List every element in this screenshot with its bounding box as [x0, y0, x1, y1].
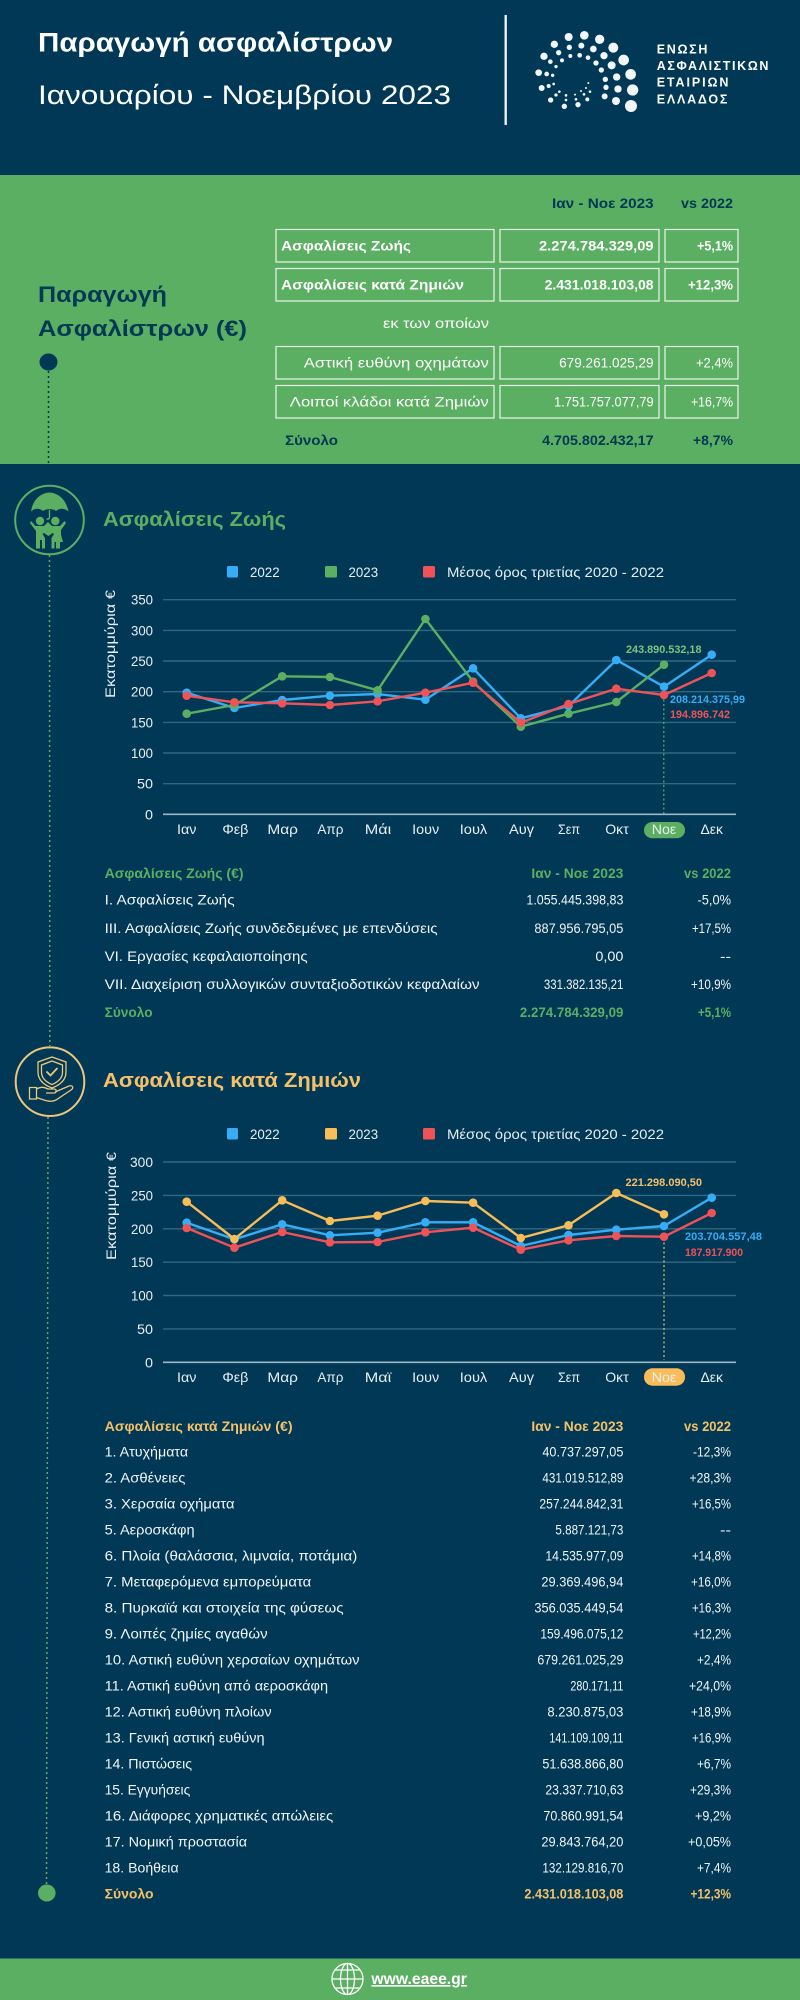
- row: life insurance: Ασφαλίσεις Ζωής: [281, 238, 411, 254]
- y axis title: Εκατομμύρια €: [103, 1152, 119, 1260]
- y axis ticks: 200: [131, 684, 153, 700]
- table: non-life insurance: 1. Ατυχήματα: [105, 1444, 188, 1459]
- month labels: Δεκ: [700, 1369, 724, 1385]
- logo text: ΕΛΛΑΔΟΣ: [657, 92, 728, 106]
- table: non-life insurance: 14.535.977,09: [545, 1548, 623, 1563]
- month labels: Οκτ: [605, 821, 629, 837]
- table: life insurance: VΙ. Εργασίες κεφαλαιοποίησης: [105, 949, 308, 964]
- value callouts: 194.896.742: [670, 709, 730, 721]
- row: total: [285, 432, 734, 448]
- logo: dot arc: [535, 31, 638, 112]
- month labels: Ιαν: [177, 1369, 196, 1385]
- table: non-life insurance: 9. Λοιπές ζημίες αγαθών: [105, 1626, 268, 1641]
- timeline connector: non-life section: [46, 1117, 48, 1885]
- of which label: εκ των οποίων: [383, 315, 489, 331]
- table: non-life insurance: 51.638.866,80: [542, 1756, 623, 1771]
- table total: [105, 1886, 731, 1902]
- table: non-life insurance: 8. Πυρκαϊά και στοιχεία της φύσεως: [105, 1600, 344, 1615]
- table total: 2.274.784.329,09: [520, 1005, 623, 1020]
- table: non-life insurance: +2,4%: [697, 1652, 731, 1667]
- month labels: Σεπ: [558, 1369, 580, 1385]
- table: non-life insurance: 16. Διάφορες χρηματικές απώλειες: [105, 1808, 334, 1823]
- row: total: 4.705.802.432,17: [542, 432, 654, 448]
- table: non-life insurance: 13. Γενική αστική ευθύνη: [105, 1730, 265, 1745]
- y axis ticks: 100: [131, 1288, 153, 1304]
- table total: [105, 1005, 731, 1020]
- table: non-life insurance: 431.019.512,89: [542, 1470, 623, 1485]
- panel heading: [38, 282, 247, 341]
- legend: life chart: [227, 564, 664, 580]
- month labels: Φεβ: [222, 1369, 248, 1385]
- table header: Ασφαλίσεις κατά Ζημιών (€): [105, 1419, 293, 1434]
- y axis title: Εκατομμύρια €: [102, 590, 118, 698]
- table: non-life insurance: 40.737.297,05: [542, 1444, 623, 1459]
- table total: +12,3%: [690, 1886, 731, 1902]
- table: non-life insurance: +28,3%: [690, 1470, 731, 1485]
- month labels: Αυγ: [509, 821, 534, 837]
- table: non-life insurance: 23.337.710,63: [545, 1782, 623, 1797]
- table: non-life insurance: +18,9%: [691, 1704, 731, 1719]
- value callouts: [626, 1177, 762, 1259]
- table: non-life insurance: +14,8%: [692, 1548, 731, 1563]
- table: non-life insurance: 12. Αστική ευθύνη πλοίων: [105, 1704, 272, 1719]
- row: motor liability: 679.261.025,29: [559, 354, 654, 370]
- table: non-life insurance: 7. Μεταφερόμενα εμπορεύματα: [105, 1574, 312, 1589]
- column headers: [552, 195, 733, 211]
- table: non-life insurance: +16,5%: [692, 1496, 731, 1511]
- table: life insurance: --: [720, 949, 731, 964]
- value callouts: 187.917.900: [685, 1247, 743, 1259]
- series: 2022: [187, 1198, 712, 1246]
- row: life insurance: +5,1%: [697, 238, 733, 254]
- icon: globe: [332, 1964, 363, 1994]
- y axis ticks: 150: [131, 1254, 153, 1270]
- month labels: Απρ: [317, 821, 343, 837]
- timeline start dot: [40, 354, 58, 463]
- logo text: ΕΤΑΙΡΙΩΝ: [657, 76, 728, 90]
- table header: Ασφαλίσεις Ζωής (€): [105, 866, 244, 881]
- table: non-life insurance: 18. Βοήθεια: [105, 1860, 179, 1875]
- icon: shield over hand: [16, 1047, 84, 1116]
- timeline connector: life section: [48, 555, 51, 1046]
- table header: vs 2022: [684, 1419, 731, 1434]
- row: motor liability: Αστική ευθύνη οχημάτων: [304, 354, 489, 370]
- month labels: [177, 1369, 724, 1385]
- y axis ticks: [130, 1154, 153, 1370]
- table: non-life insurance: +6,7%: [697, 1756, 731, 1771]
- legend: life chart: 2023: [348, 564, 378, 580]
- table: non-life insurance: [105, 1419, 731, 1902]
- table header: [105, 1419, 731, 1434]
- table: non-life insurance: 15. Εγγυήσεις: [105, 1782, 191, 1797]
- row: other non-life classes: 1.751.757.077,79: [554, 394, 654, 410]
- table: non-life insurance: 159.496.075,12: [540, 1626, 623, 1641]
- series: 2023: [187, 1193, 664, 1239]
- panel heading: Ασφαλίστρων (€): [38, 316, 247, 341]
- row: motor liability: [276, 346, 738, 379]
- table: non-life insurance: 70.860.991,54: [543, 1808, 624, 1823]
- table: non-life insurance: 5. Αεροσκάφη: [105, 1522, 195, 1537]
- table: non-life insurance: +9,2%: [695, 1808, 731, 1823]
- table: non-life insurance: +16,3%: [692, 1600, 731, 1615]
- row: life insurance: 2.274.784.329,09: [539, 238, 654, 254]
- series: three-year average: [187, 1213, 712, 1250]
- row: total: +8,7%: [693, 432, 734, 448]
- table: life insurance: +10,9%: [691, 977, 731, 992]
- month labels: Φεβ: [222, 821, 248, 837]
- table: non-life insurance: 29.369.496,94: [541, 1574, 624, 1589]
- table: life insurance: -5,0%: [698, 893, 731, 908]
- table: non-life insurance: 257.244.842,31: [539, 1496, 623, 1511]
- y axis ticks: 0: [145, 806, 153, 822]
- line chart: non-life insurance monthly premiums: [103, 1152, 762, 1386]
- row: non-life insurance: [276, 268, 738, 301]
- month labels: Μάι: [365, 821, 391, 837]
- legend: non-life chart: [227, 1126, 664, 1142]
- y axis ticks: 50: [137, 776, 153, 792]
- footer bar: [0, 1958, 800, 2000]
- line chart: life insurance monthly premiums: [102, 590, 745, 838]
- table: life insurance: 0,00: [595, 949, 623, 964]
- table: life insurance: 331.382.135,21: [544, 977, 623, 992]
- month labels: Σεπ: [558, 821, 580, 837]
- table: non-life insurance: 14. Πιστώσεις: [105, 1756, 193, 1771]
- row: non-life insurance: +12,3%: [688, 276, 734, 292]
- row: non-life insurance: Ασφαλίσεις κατά Ζημιών: [281, 276, 464, 292]
- month labels: Απρ: [317, 1369, 343, 1385]
- row: other non-life classes: Λοιποί κλάδοι κατά Ζημιών: [290, 394, 489, 410]
- row: other non-life classes: +16,7%: [691, 394, 733, 410]
- table header: Ιαν - Νοε 2023: [531, 866, 624, 881]
- y axis ticks: 200: [131, 1221, 153, 1237]
- table: non-life insurance: 132.129.816,70: [542, 1860, 623, 1875]
- value callouts: 243.890.532,18: [626, 644, 702, 656]
- table total: Σύνολο: [105, 1886, 154, 1902]
- table: non-life insurance: +29,3%: [690, 1782, 731, 1797]
- value callouts: 221.298.090,50: [626, 1177, 702, 1189]
- month labels: Οκτ: [605, 1369, 629, 1385]
- heading: non-life insurance: Ασφαλίσεις κατά Ζημιών: [103, 1070, 361, 1092]
- table: non-life insurance: -12,3%: [693, 1444, 731, 1459]
- y axis ticks: 250: [131, 653, 153, 669]
- series: 2022: [187, 655, 712, 718]
- row: motor liability: +2,4%: [696, 354, 733, 370]
- table header: vs 2022: [684, 866, 731, 881]
- table: non-life insurance: +12,2%: [693, 1626, 731, 1641]
- month labels: Μαϊ: [365, 1369, 392, 1385]
- subtitle: Ιανουαρίου - Νοεμβρίου 2023: [38, 80, 451, 110]
- logo text: ΕΝΩΣΗ: [657, 42, 707, 56]
- table: non-life insurance: +16,0%: [691, 1574, 731, 1589]
- table header: Ιαν - Νοε 2023: [531, 1419, 624, 1434]
- table: non-life insurance: --: [720, 1522, 731, 1537]
- heading: life insurance: Ασφαλίσεις Ζωής: [103, 509, 286, 531]
- November marker: [663, 1238, 665, 1360]
- value callouts: [626, 644, 745, 721]
- table: non-life insurance: 679.261.025,29: [537, 1652, 623, 1667]
- value callouts: 203.704.557,48: [685, 1231, 762, 1243]
- table: non-life insurance: 11. Αστική ευθύνη από αεροσκάφη: [105, 1679, 328, 1694]
- table: non-life insurance: 8.230.875,03: [547, 1704, 623, 1719]
- table: non-life insurance: 2. Ασθένειες: [105, 1470, 186, 1485]
- month labels: Νοε: [652, 821, 676, 837]
- table: life insurance: Ι. Ασφαλίσεις Ζωής: [105, 893, 235, 908]
- y axis ticks: 300: [130, 1154, 153, 1170]
- table: non-life insurance: 17. Νομική προστασία: [105, 1834, 247, 1849]
- title: Παραγωγή ασφαλίστρων: [38, 28, 393, 58]
- legend: non-life chart: Μέσος όρος τριετίας 2020 - 2022: [447, 1126, 664, 1142]
- table: non-life insurance: 280.171,11: [570, 1679, 623, 1694]
- logo text: [657, 42, 768, 106]
- table: non-life insurance: 3. Χερσαία οχήματα: [105, 1496, 235, 1511]
- table: life insurance: 1.055.445.398,83: [526, 893, 623, 908]
- month labels: Ιουν: [412, 1369, 439, 1385]
- table total: +5,1%: [698, 1005, 731, 1020]
- table total: 2.431.018.103,08: [524, 1886, 624, 1902]
- month labels: Ιαν: [177, 821, 196, 837]
- table header: [105, 866, 731, 881]
- header banner: [38, 15, 768, 125]
- table: life insurance: 887.956.795,05: [534, 921, 623, 936]
- column headers: Ιαν - Νοε 2023: [552, 195, 654, 211]
- month labels: Μαρ: [267, 1369, 298, 1385]
- value callouts: 208.214.375,99: [670, 694, 745, 706]
- table: life insurance: [105, 866, 731, 1020]
- column headers: vs 2022: [681, 195, 733, 211]
- website link: www.eaee.gr: [370, 1971, 467, 1988]
- table: non-life insurance: 29.843.764,20: [541, 1834, 623, 1849]
- y axis ticks: 50: [137, 1321, 153, 1337]
- table: non-life insurance: 6. Πλοία (θαλάσσια, λιμναία, ποτάμια): [105, 1548, 357, 1563]
- table: life insurance: VΙΙ. Διαχείριση συλλογικών συνταξιοδοτικών κεφαλαίων: [105, 977, 480, 992]
- table: life insurance: +17,5%: [692, 921, 731, 936]
- icon: umbrella over family: [15, 486, 84, 554]
- month labels: Μαρ: [267, 821, 298, 837]
- timeline end dot: [38, 1884, 56, 1902]
- y axis ticks: 150: [131, 714, 153, 730]
- y axis ticks: 350: [131, 592, 153, 608]
- y axis ticks: 100: [131, 745, 153, 761]
- table: non-life insurance: +16,9%: [692, 1730, 731, 1745]
- legend: non-life chart: 2022: [250, 1126, 280, 1142]
- month labels: Αυγ: [509, 1369, 534, 1385]
- series: 2023: [187, 619, 664, 727]
- month labels: Νοε: [652, 1369, 676, 1385]
- month labels: Ιουλ: [460, 821, 487, 837]
- table: non-life insurance: 141.109.109,11: [549, 1730, 623, 1745]
- y axis ticks: [131, 592, 153, 822]
- table: non-life insurance: 10. Αστική ευθύνη χερσαίων οχημάτων: [105, 1652, 360, 1667]
- series: three-year average: [187, 673, 712, 723]
- table: non-life insurance: +24,0%: [689, 1679, 731, 1694]
- row: other non-life classes: [276, 386, 738, 418]
- legend: life chart: 2022: [250, 564, 280, 580]
- table: non-life insurance: 5.887.121,73: [555, 1522, 623, 1537]
- table: life insurance: ΙΙΙ. Ασφαλίσεις Ζωής συνδεδεμένες με επενδύσεις: [105, 921, 438, 936]
- panel: premium production summary: [0, 175, 800, 464]
- row: life insurance: [276, 230, 738, 262]
- table total: Σύνολο: [105, 1005, 153, 1020]
- header divider: [504, 15, 507, 125]
- table: non-life insurance: +0,05%: [688, 1834, 731, 1849]
- month labels: Ιουν: [412, 821, 439, 837]
- legend: life chart: Μέσος όρος τριετίας 2020 - 2022: [447, 564, 664, 580]
- y axis ticks: 300: [131, 622, 153, 638]
- logo text: ΑΣΦΑΛΙΣΤΙΚΩΝ: [657, 59, 768, 73]
- row: non-life insurance: 2.431.018.103,08: [545, 276, 654, 292]
- table: non-life insurance: +7,4%: [697, 1860, 731, 1875]
- legend: non-life chart: 2023: [348, 1126, 378, 1142]
- month labels: Δεκ: [700, 821, 724, 837]
- y axis ticks: 250: [131, 1187, 153, 1203]
- table: non-life insurance: 356.035.449,54: [534, 1600, 624, 1615]
- panel heading: Παραγωγή: [38, 282, 167, 307]
- November marker: [663, 695, 665, 814]
- month labels: [177, 821, 724, 837]
- month labels: Ιουλ: [460, 1369, 487, 1385]
- row: total: Σύνολο: [285, 432, 338, 448]
- y axis ticks: 0: [145, 1354, 153, 1370]
